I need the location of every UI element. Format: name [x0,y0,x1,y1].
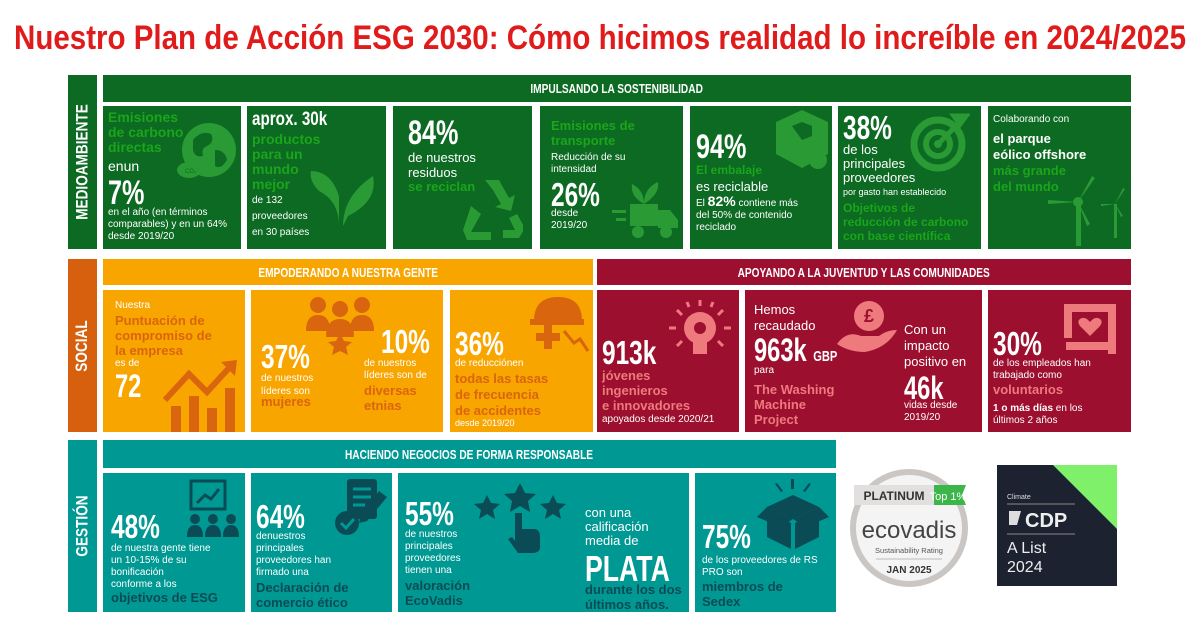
panel: Sedex: miembros de [702,579,783,594]
panel: emisiones directas: enun [108,158,139,174]
panel: accidentes: de accidentes [455,403,541,418]
icon: pound hand [837,301,897,352]
panel: puntuación compromiso: Nuestra [115,300,150,311]
icon: presentation [187,480,239,537]
panel: líderes: 37% [261,338,310,375]
panel: emisiones transporte: intensidad [551,164,597,175]
icon: growth chart [163,360,237,432]
panel: ecovadis plata: últimos años. [585,597,669,612]
panel: Sedex: Sedex [702,594,740,609]
panel: emisiones directas: Emisiones [108,109,178,125]
badge: CDP: 2024 [1007,559,1043,576]
panel: Sedex [695,473,836,612]
panel: ecovadis plata: tienen una [405,565,452,576]
panel: recaudación: Hemos [754,302,795,317]
panel: accidentes: 36% [455,325,504,362]
panel: productos: proveedores [252,211,308,222]
panel: jóvenes ingenieros: e innovadores [602,398,690,413]
panel: productos: para un [252,146,303,162]
icon: open box [757,479,829,549]
panel: recaudación: positivo en [904,354,966,369]
panel: embalaje: El 82% contiene más [696,193,798,209]
panel: proveedores objetivos: con base científica [843,229,950,243]
panel: bonificación ESG: bonificación [111,567,164,578]
panel: Sedex: PRO son [702,567,743,578]
side label: medioambiente [68,75,97,249]
panel: proveedores objetivos: proveedores [843,170,915,185]
panel: embalaje: es reciclable [696,179,768,194]
panel: líderes: mujeres [261,394,311,409]
badge: CDP: A List [1007,540,1047,557]
panel: ecovadis plata: proveedores [405,553,461,564]
panel: embalaje [690,106,832,249]
panel: recaudación: vidas desde [904,400,957,411]
panel: recaudación: 963k GBP [754,332,837,368]
panel: proveedores objetivos: Objetivos de [843,201,915,215]
icon: document check [335,479,387,535]
panel: parque eólico [988,106,1131,249]
panel: comercio ético: denuestros [256,531,305,542]
icon: globe [177,123,236,178]
panel: parque eólico: del mundo [993,179,1059,194]
badge: CDP [997,465,1117,586]
panel: recaudación [745,290,982,432]
side label: social: SOCIAL [73,320,92,371]
panel: accidentes: de frecuencia [455,387,539,402]
panel: voluntarios: de los empleados han [993,358,1091,369]
panel: emisiones directas: de carbono [108,124,183,140]
panel: voluntarios: 1 o más días en los [993,403,1082,414]
side label: medioambiente: MEDIOAMBIENTE [72,104,92,220]
panel: voluntarios: trabajado como [993,370,1062,381]
panel: bonificación ESG: de nuestra gente tiene [111,543,211,554]
panel: Sedex: de los proveedores de RS [702,555,818,566]
panel: ecovadis plata: con una [585,505,631,520]
panel: embalaje: 94% [696,128,746,166]
icon: target [910,114,970,172]
panel: accidentes: todas las tasas [455,371,548,386]
panel: residuos [393,106,532,249]
panel: emisiones directas: directas [108,139,162,155]
icon: helmet cross [530,297,590,352]
panel: productos: en 30 países [252,227,309,238]
icon: globe: CO₂ [185,169,197,175]
panel: jóvenes ingenieros [597,290,739,432]
panel: puntuación compromiso: compromiso de [115,328,212,343]
badge: ecovadis: PLATINUM [863,489,925,503]
panel: bonificación ESG: 48% [111,508,160,545]
panel: embalaje: del 50% de contenido [696,210,792,221]
panel: Sedex: 75% [702,518,751,555]
badge: ecovadis: Sustainability Rating [875,546,943,555]
panel: ecovadis plata [398,473,689,612]
panel: puntuación compromiso: 72 [115,368,141,404]
panel: puntuación compromiso [103,290,245,432]
panel: recaudación: impacto [904,338,950,353]
panel: voluntarios: voluntarios [993,382,1063,397]
panel: accidentes [450,290,593,432]
panel: recaudación: The Washing [754,382,834,397]
badge: ecovadis: Top 1% [930,491,967,503]
panel: puntuación compromiso: la empresa [115,343,183,358]
panel: líderes: diversas [364,383,417,398]
panel: productos: de 132 [252,195,283,206]
badge: ecovadis: JAN 2025 [886,565,932,576]
header: haciendo negocios [103,440,836,468]
panel: comercio ético: comercio ético [256,595,348,610]
icon: hands heart [1064,304,1116,354]
header: empoderando: EMPODERANDO A NUESTRA GENTE [258,264,438,280]
header: impulsando la sostenibilidad [103,75,1131,102]
panel: productos: mejor [252,176,290,192]
panel: bonificación ESG: conforme a los [111,579,177,590]
panel: parque eólico: el parque [993,131,1051,146]
panel: ecovadis plata: principales [405,541,453,552]
panel: bonificación ESG: un 10-15% de su [111,555,187,566]
panel: accidentes: desde 2019/20 [455,418,515,428]
badge: ecovadis: ecovadis [862,517,956,544]
panel: líderes: de nuestros [261,373,313,384]
header: haciendo negocios: HACIENDO NEGOCIOS DE FORMA RESPONSABLE [345,446,594,462]
panel: recaudación: Con un [904,322,946,337]
panel: líderes: 10% [381,323,430,360]
panel: proveedores objetivos: de los [843,142,878,157]
panel: puntuación compromiso: es de [115,358,139,369]
side label: gestión [68,440,97,612]
panel: recaudación: para [754,365,774,376]
panel: proveedores objetivos: por gasto han establecido [843,187,946,197]
panel: comercio ético: proveedores han [256,555,331,566]
panel: ecovadis plata: de nuestros [405,529,457,540]
panel: líderes [251,290,443,432]
panel: residuos: residuos [408,165,457,180]
badge: CDP: Climate [1007,494,1031,501]
panel: embalaje: reciclado [696,222,736,233]
panel: ecovadis plata: calificación [585,519,649,534]
icon: people star [306,297,374,355]
panel: puntuación compromiso: Puntuación de [115,313,205,328]
panel: jóvenes ingenieros: apoyados desde 2020/21 [602,414,714,425]
panel: ecovadis plata: PLATA [585,548,670,589]
panel: líderes: etnias [364,398,402,413]
panel: recaudación: 2019/20 [904,412,940,423]
icon: stars hand [474,483,566,553]
panel: productos: mundo [252,161,299,177]
icon: recycle [463,180,523,240]
panel: comercio ético [251,473,392,612]
icon: truck [612,182,678,238]
panel: emisiones directas: 7% [108,174,144,212]
panel: embalaje: El embalaje [696,163,762,177]
panel: productos: productos [252,131,320,147]
panel: bonificación ESG: objetivos de ESG [111,590,218,605]
panel: proveedores objetivos [838,106,981,249]
panel: productos: aprox. 30k [252,109,327,130]
side label: social [68,259,97,432]
side label: gestión: GESTIÓN [73,495,92,557]
panel: emisiones transporte [540,106,683,249]
panel: jóvenes ingenieros: ingenieros [602,383,668,398]
panel: líderes: líderes son de [364,370,427,381]
panel: parque eólico: Colaborando con [993,114,1069,125]
header: impulsando la sostenibilidad: IMPULSANDO LA SOSTENIBILIDAD [531,81,703,96]
panel: recaudación: Machine [754,397,806,412]
panel: emisiones transporte: transporte [551,133,615,148]
panel: comercio ético: Declaración de [256,580,348,595]
panel: ecovadis plata: valoración [405,578,470,593]
header: empoderando [103,259,593,285]
panel: residuos: se reciclan [408,179,475,194]
panel: comercio ético: firmado una [256,567,309,578]
panel: proveedores objetivos: reducción de carbono [843,215,968,229]
panel: líderes: líderes son [261,386,310,397]
panel: proveedores objetivos: 38% [843,109,892,146]
panel: jóvenes ingenieros: 913k [602,334,656,371]
panel: ecovadis plata: 55% [405,495,454,532]
panel: voluntarios: 30% [993,325,1042,362]
panel: recaudación: recaudado [754,318,815,333]
icon: leaves [310,171,374,226]
panel: emisiones directas: en el año (en términos comparables) y en un 64% desde 2019/20 [108,207,227,242]
panel: accidentes: de reducciónen [455,358,523,369]
panel: parque eólico: eólico offshore [993,147,1086,162]
badge: ecovadis [850,469,968,587]
panel: ecovadis plata: EcoVadis [405,593,463,608]
badge: CDP: CDP [1025,510,1067,532]
panel: emisiones transporte: desde [551,208,578,219]
panel: emisiones transporte: Reducción de su [551,152,626,163]
panel: emisiones transporte: Emisiones de [551,118,635,133]
panel: voluntarios [988,290,1131,432]
panel: ecovadis plata: durante los dos [585,582,682,597]
icon: light bulb [669,300,731,354]
panel: emisiones directas [103,106,241,249]
header: apoyando juventud: APOYANDO A LA JUVENTUD Y LAS COMUNIDADES [738,264,990,280]
panel: líderes: de nuestros [364,358,416,369]
panel: parque eólico: más grande [993,163,1066,178]
panel: productos [247,106,386,249]
icon: pound hand: £ [864,306,874,326]
panel: proveedores objetivos: principales [843,156,905,171]
panel: recaudación: Project [754,412,798,427]
icon: wind turbines [1048,176,1125,246]
panel: comercio ético: principales [256,543,304,554]
panel: jóvenes ingenieros: jóvenes [602,368,650,383]
panel: voluntarios: últimos 2 años [993,415,1057,426]
panel: residuos: de nuestros [408,150,476,165]
header: apoyando juventud [597,259,1131,285]
panel: ecovadis plata: media de [585,533,638,548]
panel: emisiones transporte: 2019/20 [551,220,587,231]
panel: comercio ético: 64% [256,498,305,535]
panel: emisiones transporte: 26% [551,176,600,213]
panel: recaudación: 46k [904,370,944,406]
icon: box [776,110,828,169]
panel: residuos: 84% [408,114,458,152]
panel: bonificación ESG [103,473,245,612]
